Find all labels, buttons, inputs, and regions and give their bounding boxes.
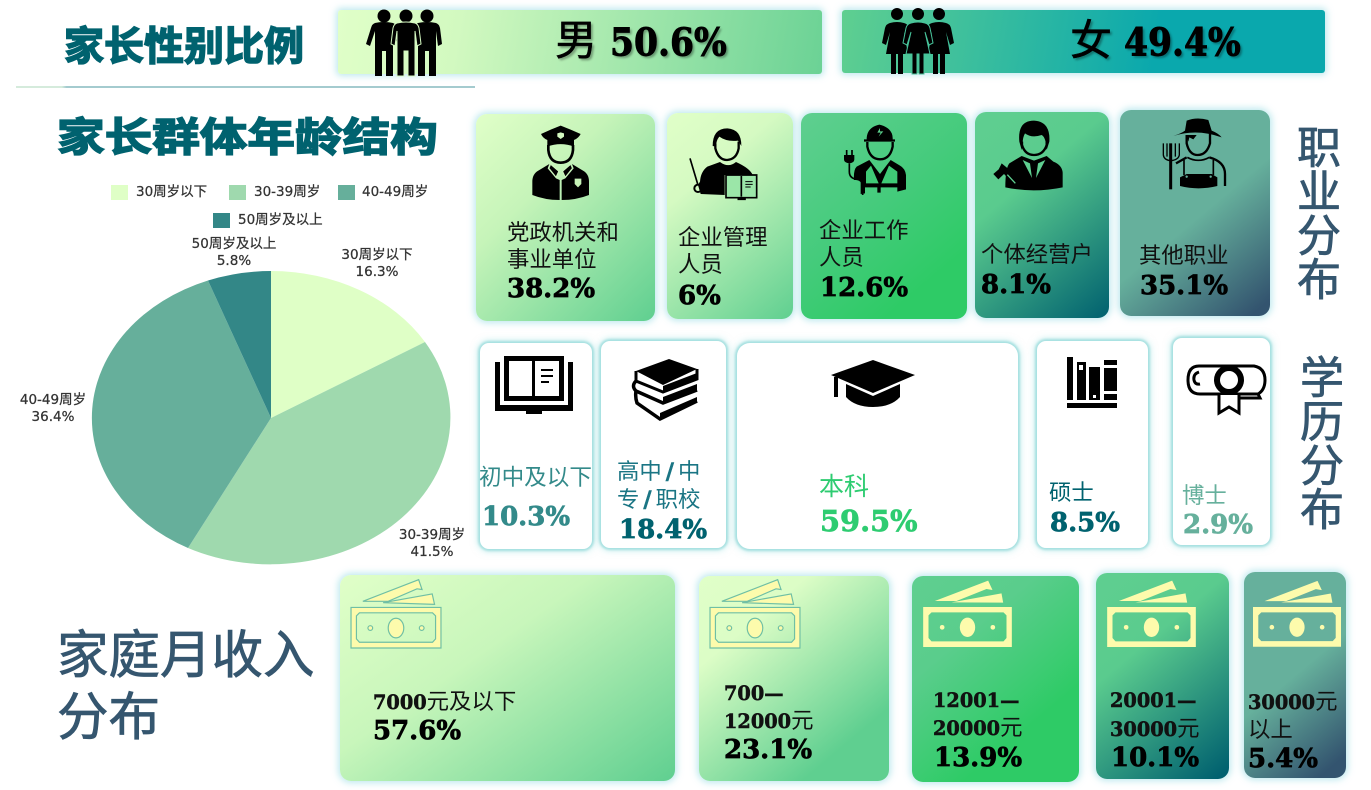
heading: monthly household income: 分布 [57,688,160,746]
panel: male [338,10,822,74]
icon: open book [495,356,573,414]
heading: monthly household income: 家庭月收入 [57,626,315,684]
pie label: 40-49: 36.4% [32,408,74,424]
pie label: under 30: 16.3% [356,264,398,280]
label [819,218,909,270]
label: 7000元及以下 [373,689,516,714]
panel: education junior high [480,343,592,549]
label: male share [555,17,729,65]
label [507,220,619,272]
legend: 40-49周岁 [362,184,428,200]
label: 硕士 [1049,480,1094,505]
icon: manager with pointer and book [689,128,758,200]
label: 事业单位 [507,247,597,272]
pie label: 50+ [192,236,276,268]
value: 10.3% [482,502,570,532]
panel: female: 49.4% [1124,21,1241,65]
icon: businessman with gavel [993,120,1063,190]
label: 专/职校 [617,487,700,513]
icon: diploma scroll [1186,364,1266,416]
value: 59.5% [820,504,918,538]
label: 党政机关和 [507,220,619,245]
icon: police officer [532,126,589,200]
label: 以上 [1248,717,1293,742]
label: 20001— [1110,689,1196,712]
legend: 30-39周岁 [254,184,320,200]
heading: occupation distribution: 布 [1297,256,1341,305]
divider [16,86,475,88]
label: 本科 [819,473,869,501]
label: 30000元 [1248,689,1337,714]
value: 13.9% [934,743,1022,773]
heading: occupation distribution [1297,124,1341,305]
pie label: 40-49: 40-49周岁 [20,392,86,408]
label: 初中及以下 [479,465,592,490]
icon: three men [366,10,442,76]
panel: occupation party and government [476,114,655,321]
label: 30000元 [1110,716,1199,741]
label: 人员 [678,252,723,277]
label: 个体经营户 [981,242,1093,267]
value: 5.4% [1248,744,1318,774]
panel: female [842,10,1325,73]
label [1248,689,1337,742]
value: 8.5% [1050,508,1120,538]
value: 12.6% [820,273,908,303]
panel: income above 30000 [1244,572,1346,778]
panel: occupation enterprise manager [667,113,793,319]
label: 人员 [819,245,864,270]
heading: occupation distribution: 业 [1297,168,1341,217]
label: 12000元 [724,708,813,733]
heading: occupation distribution: 职 [1297,124,1341,173]
panel: male: 50.6% [610,21,727,65]
legend: 30周岁以下 [136,184,207,200]
title: gender ratio: 家长性别比例 [64,25,304,69]
label: female share [1070,17,1243,65]
heading: education distribution: 分 [1300,442,1344,491]
icon: farmer with pitchfork [1162,118,1226,190]
label: 20000元 [933,715,1022,740]
pie label: 30-39: 41.5% [411,544,453,560]
value: 2.9% [1183,510,1253,540]
label: 12001— [933,689,1019,712]
panel: education doctorate [1173,338,1270,545]
heading: education distribution: 历 [1300,398,1344,447]
icon: banknotes [923,580,1012,647]
panel: education bachelor [737,343,1018,549]
pie chart: age [92,271,450,564]
pie label: 40-49 [20,392,86,424]
pie label: 30-39: 30-39周岁 [399,527,465,543]
legend [111,184,428,228]
heading: education distribution: 布 [1300,486,1344,535]
pie label: 30-39 [399,527,465,560]
panel: income 20001 to 30000 [1096,573,1229,779]
value: 6% [678,281,721,311]
value: 10.1% [1111,743,1199,773]
pie label: under 30: 30周岁以下 [341,247,413,263]
label: 高中/中 [617,459,700,485]
label: 700— [724,682,784,705]
label: 博士 [1182,483,1227,508]
icon: banknotes [1253,580,1341,647]
icon: bookshelf [1067,357,1117,408]
pie label: under 30 [341,247,413,280]
label [617,459,700,513]
title: age structure: 家长群体年龄结构 [57,116,438,160]
value: 8.1% [981,270,1051,300]
panel: female: 女 [1070,17,1112,64]
panel: income 12001 to 20000 [912,576,1079,782]
icon: three women [882,8,954,74]
icon: graduation cap [831,360,915,407]
panel: income 700 to 12000 [699,576,889,781]
icon: banknotes [709,579,801,649]
panel: education senior high [601,341,726,548]
value: 23.1% [724,735,812,765]
value: 35.1% [1140,271,1228,301]
icon: stack of books [632,359,698,421]
value: 18.4% [619,515,707,545]
icon: electrical worker [844,124,906,195]
heading: monthly household income [57,626,315,746]
label [933,689,1022,740]
panel: male: 男 [555,17,597,64]
heading: occupation distribution: 分 [1297,212,1341,261]
label [1110,689,1199,741]
heading: education distribution [1300,354,1344,535]
icon: banknotes [1107,580,1196,647]
panel: occupation enterprise worker [801,113,967,319]
panel: occupation other [1120,110,1270,316]
heading: education distribution: 学 [1300,354,1344,403]
legend: 50周岁及以上 [238,212,323,228]
pie label: 50+: 5.8% [217,252,251,268]
panel: income up to 7000 [340,575,675,781]
value: 57.6% [373,716,461,746]
label: 其他职业 [1139,243,1229,268]
label: 企业管理 [678,225,768,250]
panel: occupation self-employed [975,112,1109,318]
icon: banknotes [350,579,442,649]
label [724,682,813,733]
label [678,225,768,277]
pie label: 50+: 50周岁及以上 [192,236,276,252]
value: 38.2% [507,274,595,304]
panel: education master [1037,341,1148,548]
label: 企业工作 [819,218,909,243]
